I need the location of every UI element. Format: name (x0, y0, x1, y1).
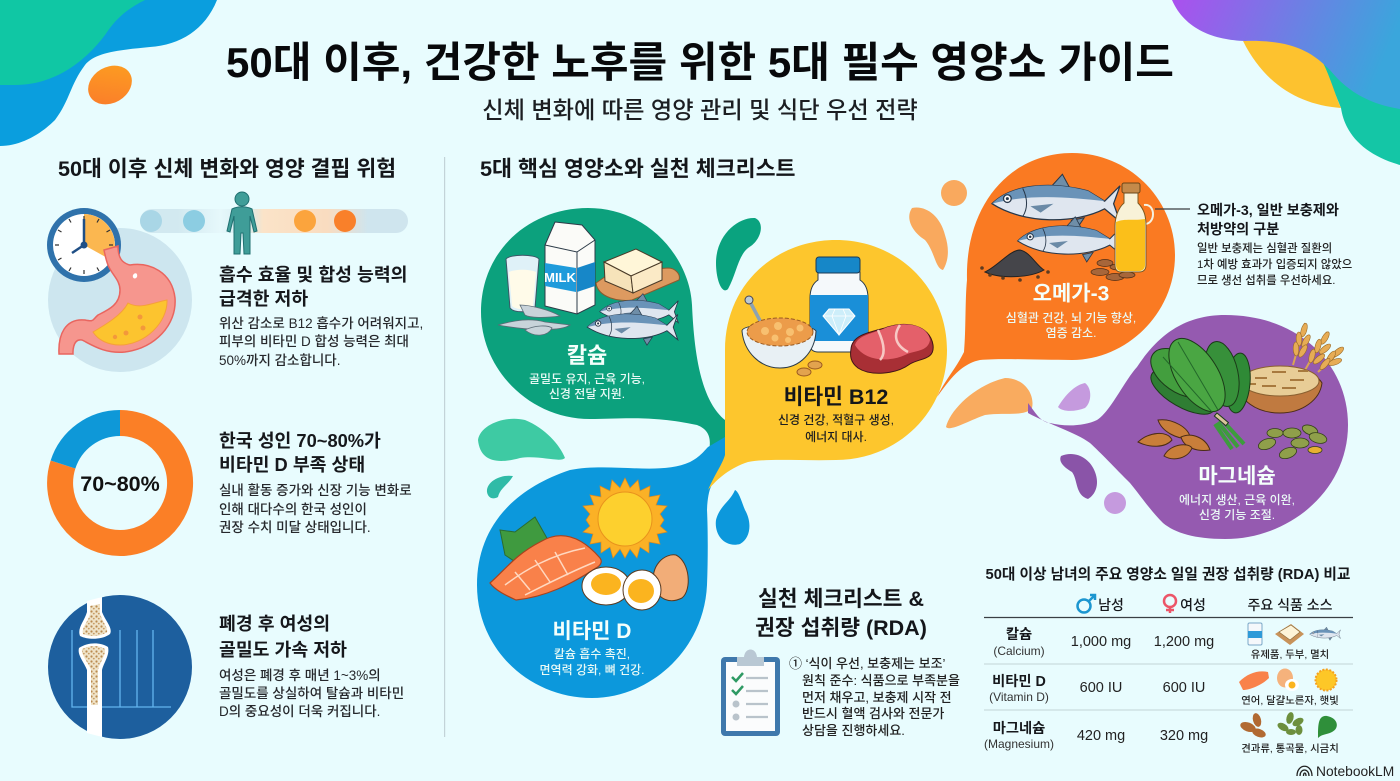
text block: vitamin D deficiency: 비타민 D 부족 상태 (219, 454, 365, 475)
panel: vitamin D blob: 칼슘 흡수 촉진, (554, 647, 630, 661)
icon: clipboard (721, 650, 780, 736)
icon: pill (797, 368, 811, 376)
brand: NotebookLM: NotebookLM (1316, 764, 1394, 779)
table header: 남성 (1098, 597, 1124, 613)
icon: spinach (1142, 329, 1253, 449)
text block: absorption: 흡수 효율 및 합성 능력의 (219, 264, 408, 285)
row: vitamin D: (Vitamin D) (989, 690, 1049, 704)
heading: right section: 5대 핵심 영양소와 실천 체크리스트 (480, 156, 796, 181)
icon: mackerel (992, 174, 1120, 229)
donut chart: 70~80% (60, 423, 180, 543)
text block: absorption (219, 264, 423, 368)
splash shapes (478, 180, 1126, 545)
panel: vitamin B12 blob: 신경 건강, 적혈구 생성, (778, 413, 894, 427)
panel: vitamin B12 blob: 비타민 B12 (784, 385, 888, 409)
callout: omega-3 vs prescription (1155, 203, 1352, 287)
callout: omega-3 vs prescription: 처방약의 구분 (1197, 222, 1279, 238)
icon: steak (851, 324, 933, 373)
icon: stomach (59, 246, 175, 354)
panel: magnesium blob (1028, 315, 1348, 539)
row: vitamin D: 600 IU (1163, 680, 1205, 696)
row: calcium: 칼슘 (1006, 626, 1032, 643)
text block: vitamin D deficiency: 권장 수치 미달 상태입니다. (219, 520, 371, 535)
text block: menopause: 골밀도 가속 저하 (219, 639, 347, 660)
panel: vitamin B12 blob (708, 240, 947, 490)
row: vitamin D (989, 668, 1339, 707)
row: calcium: 1,200 mg (1154, 634, 1214, 650)
text block: menopause: 골밀도를 상실하여 탈슘과 비타민 (219, 686, 404, 701)
icon: clock (47, 208, 121, 282)
heading: left section: 50대 이후 신체 변화와 영양 결핍 위험 (58, 156, 396, 181)
icon: male (1078, 595, 1095, 612)
top-right corner blobs (1172, 0, 1400, 165)
panel: calcium blob: 칼슘 (567, 343, 607, 368)
panel: calcium blob: 골밀도 유지, 근육 기능, (529, 372, 645, 386)
icon: grain bowl (1237, 366, 1322, 413)
text block: checklist item: 먼저 채우고, 보충제 시작 전 (802, 690, 952, 705)
table header: 주요 식품 소스 (1247, 597, 1333, 613)
panel: omega-3 blob: 염증 감소. (1046, 326, 1096, 340)
row: vitamin D: 600 IU (1080, 680, 1122, 696)
panel: magnesium blob: 에너지 생산, 근육 이완, (1179, 493, 1295, 507)
icon: person (227, 192, 257, 254)
title: 50대 이후, 건강한 노후를 위한 5대 필수 영양소 가이드 (226, 39, 1174, 86)
callout: omega-3 vs prescription: 오메가-3, 일반 보충제와 (1197, 203, 1339, 219)
icon: oil bottle (1115, 183, 1153, 272)
panel: omega-3 blob: 오메가-3 (1033, 282, 1109, 306)
table title: 50대 이상 남녀의 주요 영양소 일일 권장 섭취량 (RDA) 비교 (986, 566, 1350, 583)
callout: omega-3 vs prescription: 1차 예방 효과가 입증되지 않았으 (1197, 258, 1352, 271)
text block: checklist item (789, 656, 960, 738)
panel: vitamin D blob: 면역력 강화, 뼈 건강. (540, 663, 644, 677)
text block: absorption: 급격한 저하 (219, 288, 308, 309)
icon: cereal bowl (742, 296, 816, 368)
icon: sun (583, 478, 667, 558)
text block: menopause: 여성은 폐경 후 매년 1~3%의 (219, 668, 381, 683)
panel: vitamin D blob: 비타민 D (553, 620, 631, 643)
heading: checklist and RDA: 실천 체크리스트 & (758, 587, 924, 611)
callout: omega-3 vs prescription: 므로 생선 섭취를 우선하세요. (1197, 274, 1335, 287)
heading: checklist and RDA: 권장 섭취량 (RDA) (755, 616, 927, 640)
section divider (444, 157, 445, 737)
heading: checklist and RDA (755, 587, 927, 640)
row: calcium: 1,000 mg (1071, 634, 1131, 650)
panel: omega-3 blob: 심혈관 건강, 뇌 기능 향상, (1006, 311, 1136, 325)
text block: checklist item: 반드시 혈액 검사와 전문가 (802, 706, 944, 721)
callout: omega-3 vs prescription: 일반 보충제는 심혈관 질환의 (1197, 241, 1332, 255)
row: calcium: 유제품, 두부, 멸치 (1251, 648, 1329, 661)
panel: calcium blob (481, 208, 725, 455)
icon: stomach and clock (47, 208, 192, 372)
text block: menopause: 폐경 후 여성의 (219, 613, 330, 634)
icon: salmon (490, 517, 601, 600)
icon: female (1164, 595, 1176, 613)
text block: menopause: D의 중요성이 더욱 커집니다. (219, 704, 380, 719)
panel: calcium blob: 신경 전달 지원. (549, 387, 625, 401)
text block: checklist item: ① ‘식이 우선, 보충제는 보조’ (789, 656, 946, 671)
text block: checklist item: 상담을 진행하세요. (802, 723, 905, 738)
icon: almonds (1138, 420, 1210, 459)
icon: wheat (1293, 322, 1345, 372)
timeline strip (140, 192, 408, 254)
row: vitamin D: 비타민 D (992, 673, 1046, 690)
text block: absorption: 피부의 비타민 D 합성 능력은 최대 (219, 334, 409, 349)
panel: omega-3 blob (937, 153, 1175, 397)
icon: tofu on board (596, 249, 679, 300)
row: magnesium: 마그네슘 (993, 720, 1045, 737)
row: magnesium: 320 mg (1160, 728, 1208, 744)
icon: pills (808, 361, 822, 369)
icon: seed pile (980, 250, 1050, 282)
icon: anchovies (498, 305, 570, 335)
text block: checklist item: 원칙 준수: 식품으로 부족분을 (802, 673, 960, 688)
icon: pumpkin seeds (1257, 423, 1328, 461)
subtitle: 신체 변화에 따른 영양 관리 및 식단 우선 전략 (482, 97, 918, 123)
row: vitamin D: 연어, 달걀노른자, 햇빛 (1241, 694, 1339, 707)
panel: magnesium blob: 신경 기능 조절. (1199, 508, 1275, 522)
icon: bottle (810, 257, 868, 352)
text block: vitamin D deficiency: 인해 대다수의 한국 성인이 (219, 502, 367, 517)
text block: menopause (219, 613, 404, 719)
text block: vitamin D deficiency: 실내 활동 증가와 신장 기능 변화로 (219, 483, 412, 498)
icon: flax seeds (1091, 260, 1135, 280)
icon: bone density (48, 595, 192, 739)
row: calcium: (Calcium) (993, 644, 1045, 658)
row: calcium (993, 623, 1340, 661)
panel: vitamin D blob (477, 437, 725, 698)
text block: absorption: 50%까지 감소합니다. (219, 353, 340, 368)
table header: 여성 (1180, 597, 1206, 613)
icon: milk carton: MILK (544, 270, 576, 285)
row: magnesium (984, 711, 1339, 755)
icon: glass of milk (506, 255, 539, 312)
row: magnesium: (Magnesium) (984, 737, 1054, 751)
text block: absorption: 위산 감소로 B12 흡수가 어려워지고, (219, 315, 423, 331)
icon: fish (600, 294, 678, 327)
icon: milk carton (544, 222, 595, 314)
top-left corner blobs (0, 0, 217, 146)
text block: vitamin D deficiency (219, 430, 412, 535)
donut chart: 70~80%: 70~80% (80, 472, 160, 496)
table: RDA comparison (984, 566, 1353, 755)
icon: eggs (582, 555, 688, 610)
table header (1078, 595, 1333, 613)
row: magnesium: 견과류, 통곡물, 시금치 (1241, 743, 1339, 755)
panel: vitamin B12 blob: 에너지 대사. (805, 430, 867, 444)
panel: magnesium blob: 마그네슘 (1198, 465, 1276, 488)
text block: vitamin D deficiency: 한국 성인 70~80%가 (219, 430, 381, 451)
row: magnesium: 420 mg (1077, 728, 1125, 744)
